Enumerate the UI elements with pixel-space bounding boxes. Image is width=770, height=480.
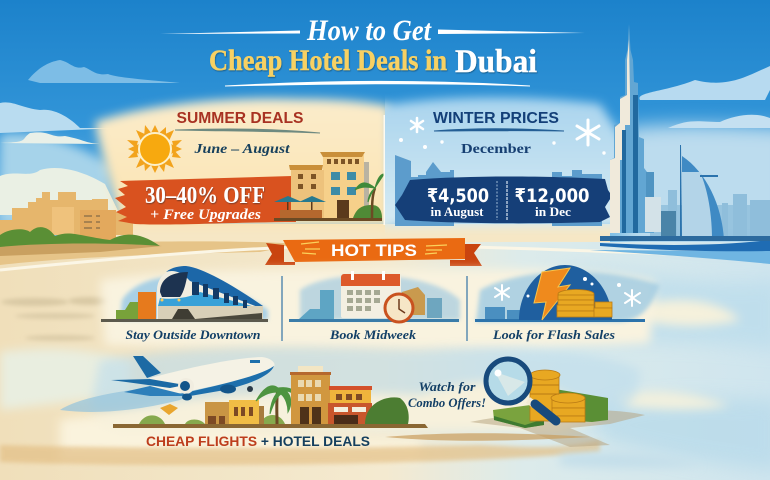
icon: coins, cash and magnifier [385, 359, 645, 447]
icon: airplane [60, 356, 274, 415]
heading: summer deals: SUMMER DEALS [176, 110, 304, 127]
icon: sun [127, 125, 182, 173]
banner: winter rates [395, 176, 612, 223]
label: look for flash sales: Look for Flash Sales [492, 327, 615, 342]
winter skyline [395, 155, 602, 226]
hot tips banner: HOT TIPS [331, 241, 417, 260]
icon: small town [113, 366, 428, 428]
label: watch for combo offers: Combo Offers! [408, 395, 486, 410]
tip: look for flash sales [475, 265, 660, 342]
panel: winter prices [370, 98, 630, 226]
label: book midweek: Book Midweek [329, 327, 417, 342]
date: june to august: June – August [193, 142, 291, 157]
panel: cheap flights and hotel deals [60, 347, 645, 449]
icon: snowflakes [400, 118, 605, 154]
banner: 30-40% off: + Free Upgrades [150, 207, 261, 223]
icon: hotel and palm [274, 152, 384, 221]
icon: Burj Khalifa and Burj Al Arab skyline [600, 24, 770, 241]
banner: 30-40% off: 30–40% OFF [145, 183, 265, 209]
title [160, 14, 585, 86]
date: december: December [461, 142, 531, 157]
label: stay outside downtown: Stay Outside Downtown [126, 327, 260, 342]
label: watch for combo offers: Watch for [418, 379, 476, 394]
clouds in the sky [0, 60, 770, 215]
panel: tips [100, 265, 660, 348]
label: cheap flights and hotel deals: CHEAP FLIGHTS + HOTEL DEALS [146, 433, 370, 449]
tip: stay outside downtown [101, 266, 268, 342]
banner: winter rates: ₹12,000 [514, 185, 590, 207]
hot tips banner [265, 238, 482, 266]
banner: winter rates: in August [430, 204, 484, 219]
title: How to Get [306, 14, 432, 47]
label: watch for combo offers [408, 379, 486, 410]
banner: 30-40% off [115, 176, 296, 225]
banner: winter rates: ₹4,500 [427, 185, 489, 207]
left skyline [0, 192, 162, 256]
banner: winter rates: in Dec [535, 204, 571, 219]
heading: winter prices: WINTER PRICES [433, 110, 559, 127]
title: Dubai [455, 44, 537, 80]
panel: summer deals [0, 98, 390, 256]
tip: book midweek [289, 271, 460, 342]
title: Cheap Hotel Deals in [209, 44, 447, 77]
